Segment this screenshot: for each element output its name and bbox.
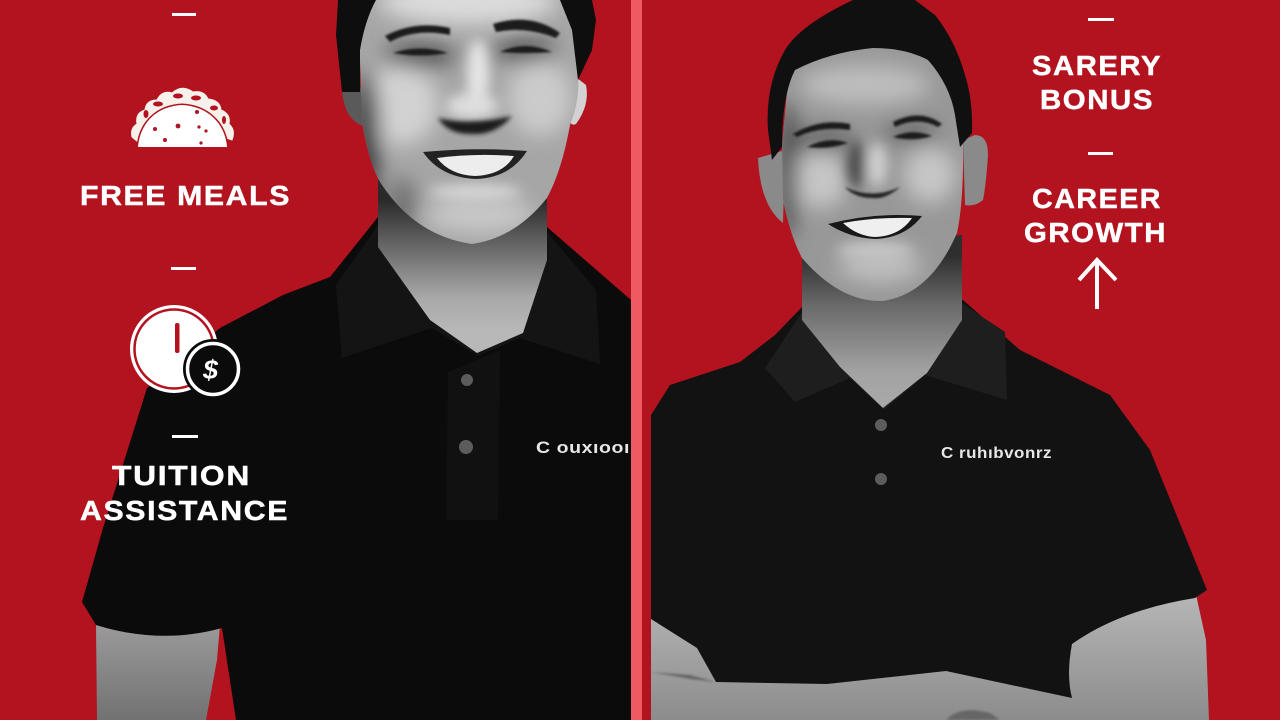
salary bonus label: SARERY xyxy=(1032,50,1162,81)
centre divider xyxy=(631,0,642,720)
right man's hair xyxy=(768,0,972,160)
photo: left man in black polo xyxy=(82,0,631,720)
left man's teeth xyxy=(437,155,514,176)
right benefits column xyxy=(1024,18,1167,309)
photo: right man in black polo xyxy=(651,0,1209,720)
icon: taco xyxy=(132,88,233,147)
left man's ears xyxy=(342,78,587,126)
right man's polo shirt xyxy=(651,300,1207,698)
right man's arms xyxy=(651,590,1209,720)
left man's eyebrows and eyes xyxy=(385,20,560,56)
right man's nose shadow xyxy=(845,187,900,198)
salary bonus label xyxy=(1032,50,1162,115)
dash xyxy=(1088,18,1114,21)
dash xyxy=(172,435,198,438)
right man's collar xyxy=(765,304,1007,410)
left man's smile xyxy=(423,149,527,179)
left man's polo shirt xyxy=(82,217,631,720)
icon: up arrow xyxy=(1079,260,1116,309)
career growth label: CAREER xyxy=(1032,183,1162,214)
free meals label: FREE MEALS xyxy=(80,180,291,211)
tuition assistance label: ASSISTANCE xyxy=(80,495,289,526)
left man's forearm xyxy=(96,625,220,720)
right man's shirt logo: C ruhıbvonrz xyxy=(941,445,1052,462)
dash xyxy=(171,267,196,270)
right man's ears xyxy=(758,135,988,223)
right man's teeth xyxy=(843,218,912,237)
left man's buttons xyxy=(459,374,473,454)
dash xyxy=(1088,152,1113,155)
left man's hair xyxy=(336,0,596,92)
left man's nose shadow xyxy=(438,116,512,134)
salary bonus label: BONUS xyxy=(1040,84,1154,115)
dash xyxy=(172,13,196,16)
left man's collar xyxy=(336,225,600,364)
career growth label: GROWTH xyxy=(1024,217,1167,248)
left man's shirt logo: C ouxıooı xyxy=(536,438,630,457)
right man's buttons xyxy=(875,419,887,485)
right man's face xyxy=(782,48,964,301)
left man's placket xyxy=(446,350,500,520)
right man's smile xyxy=(828,215,922,239)
tuition assistance label xyxy=(80,460,289,526)
tuition assistance label: TUITION xyxy=(112,460,251,491)
left man's face xyxy=(360,0,578,244)
right man's neck xyxy=(802,235,962,408)
left benefits column xyxy=(80,13,291,526)
icon: clock and dollar coin xyxy=(130,305,243,399)
right man's eyebrows and eyes xyxy=(793,115,942,148)
right man's forearm shadow xyxy=(651,672,1000,720)
left man's neck xyxy=(378,180,547,353)
icon: clock and dollar coin: $ xyxy=(202,355,219,385)
career growth label xyxy=(1024,183,1167,248)
